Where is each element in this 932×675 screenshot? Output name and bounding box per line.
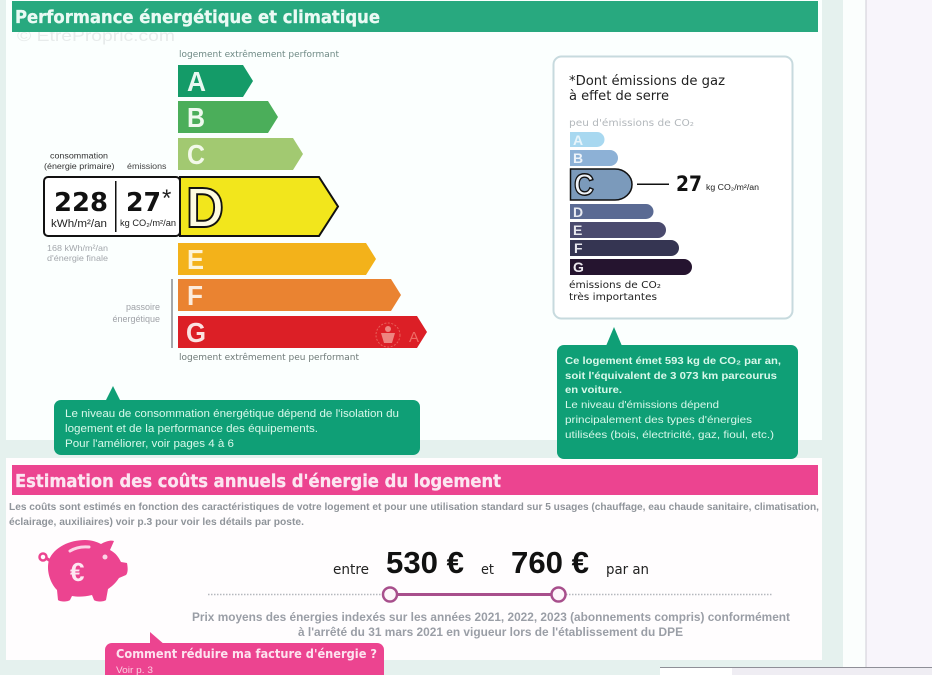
callout: reduce energy bill — [105, 632, 384, 675]
callout: energy consumption: Le niveau de consommation énergétique dépend de l'isolation du — [65, 408, 399, 420]
class E — [178, 243, 376, 275]
consumption and emissions box — [44, 150, 180, 236]
class G: G — [186, 317, 206, 348]
CO2 class D: D — [573, 204, 583, 220]
CO2 class G: G — [573, 259, 584, 275]
CO2 class F — [570, 240, 679, 256]
icon: piggy bank: € — [70, 557, 84, 587]
class A — [178, 65, 253, 97]
passoire energetique label: énergétique — [112, 314, 160, 324]
CO2 class C highlighted: C — [574, 167, 594, 202]
CO2 class A: A — [573, 132, 583, 148]
consumption and emissions box: * — [162, 185, 171, 212]
callout: emissions: en voiture. — [565, 384, 622, 396]
top scale label: logement extrêmement performant — [179, 49, 340, 60]
panel: greenhouse gas emissions — [554, 56, 792, 318]
costs description: Les coûts sont estimés en fonction des caractéristiques de votre logement et pour une utilisation standard sur 5 usages (chauffage, eau chaude sanitaire, climatisation, — [9, 502, 819, 513]
class D highlighted — [180, 176, 338, 240]
cost range: 530 € — [386, 545, 464, 580]
callout: emissions: soit l'équivalent de 3 073 km parcourus — [565, 370, 777, 382]
price note: à l'arrêté du 31 mars 2021 en vigueur lors de l'établissement du DPE — [298, 625, 683, 639]
heading: annual costs — [12, 465, 818, 495]
consumption and emissions box: (énergie primaire) — [44, 161, 115, 171]
CO2 class B — [570, 150, 618, 166]
consumption and emissions box: 228 — [54, 188, 108, 218]
cost range: entre — [333, 562, 369, 578]
CO2 class G — [570, 259, 692, 275]
passoire energetique label — [112, 279, 173, 348]
consumption and emissions box: kg CO₂/m²/an — [120, 218, 176, 228]
price note — [192, 610, 790, 639]
final energy note — [47, 243, 108, 263]
CO2 class D — [570, 204, 654, 220]
final energy note: 168 kWh/m²/an — [47, 243, 108, 253]
CO2 class E: E — [573, 222, 582, 238]
watermark: © EtrePropric.com — [17, 28, 175, 45]
class G: A — [409, 329, 419, 346]
class B — [178, 101, 278, 133]
CO2 class A — [570, 132, 605, 148]
callout: emissions: principalement des types d'énergies — [565, 414, 752, 426]
class G — [178, 316, 427, 348]
cost slider — [208, 588, 773, 602]
final energy note: d'énergie finale — [47, 253, 108, 263]
CO2 class E — [570, 222, 666, 238]
cost range: et — [481, 562, 494, 578]
class E: E — [187, 244, 204, 275]
passoire energetique label: passoire — [126, 302, 160, 312]
cost range — [333, 545, 649, 580]
heading: annual costs: Estimation des coûts annuels d'énergie du logement — [15, 471, 501, 492]
class B: B — [187, 102, 205, 133]
DPE energy scale — [178, 49, 427, 363]
CO2 class C highlighted — [570, 167, 632, 202]
heading: performance — [12, 1, 818, 32]
class F: F — [187, 280, 203, 311]
CO2 value: kg CO₂/m²/an — [706, 183, 759, 192]
class C: C — [187, 139, 205, 170]
consumption and emissions box: consommation — [50, 150, 108, 160]
costs description — [9, 502, 819, 528]
icon: piggy bank — [40, 540, 128, 602]
price note: Prix moyens des énergies indexés sur les années 2021, 2022, 2023 (abonnements compris) conformément — [192, 610, 790, 624]
consumption and emissions box: émissions — [127, 161, 166, 171]
class C — [178, 138, 303, 170]
callout: energy consumption — [54, 386, 420, 455]
CO2 value — [637, 172, 759, 196]
panel: greenhouse gas emissions: émissions de CO₂ — [569, 279, 661, 291]
callout: reduce energy bill: Comment réduire ma facture d'énergie ? — [116, 647, 377, 661]
class D highlighted: D — [186, 176, 224, 240]
callout: energy consumption: logement et de la performance des équipements. — [65, 423, 318, 435]
consumption and emissions box: 27 — [126, 188, 161, 218]
consumption and emissions box: kWh/m²/an — [51, 218, 107, 230]
class F — [178, 279, 401, 311]
heading: performance: Performance énergétique et climatique — [15, 7, 380, 28]
callout: energy consumption: Pour l'améliorer, voir pages 4 à 6 — [65, 438, 234, 450]
CO2 class F: F — [574, 240, 583, 256]
bottom scale label: logement extrêmement peu performant — [179, 352, 360, 363]
cost range: 760 € — [511, 545, 589, 580]
costs description: éclairage, auxiliaires) voir p.3 pour voir les détails par poste. — [9, 517, 304, 528]
cost range: par an — [606, 562, 649, 578]
callout: emissions: Ce logement émet 593 kg de CO₂ par an, — [565, 355, 781, 367]
class A: A — [187, 66, 206, 97]
panel: greenhouse gas emissions: *Dont émissions de gaz — [569, 74, 725, 89]
CO2 class B: B — [573, 150, 583, 166]
CO2 value: 27 — [676, 172, 702, 196]
panel: greenhouse gas emissions: peu d'émissions de CO₂ — [569, 118, 694, 129]
panel: greenhouse gas emissions: très importantes — [569, 291, 657, 303]
callout: emissions: utilisées (bois, électricité, gaz, fioul, etc.) — [565, 429, 774, 441]
panel: greenhouse gas emissions: à effet de serre — [569, 89, 669, 104]
callout: emissions: Le niveau d'émissions dépend — [565, 399, 719, 411]
callout: emissions — [557, 327, 798, 459]
